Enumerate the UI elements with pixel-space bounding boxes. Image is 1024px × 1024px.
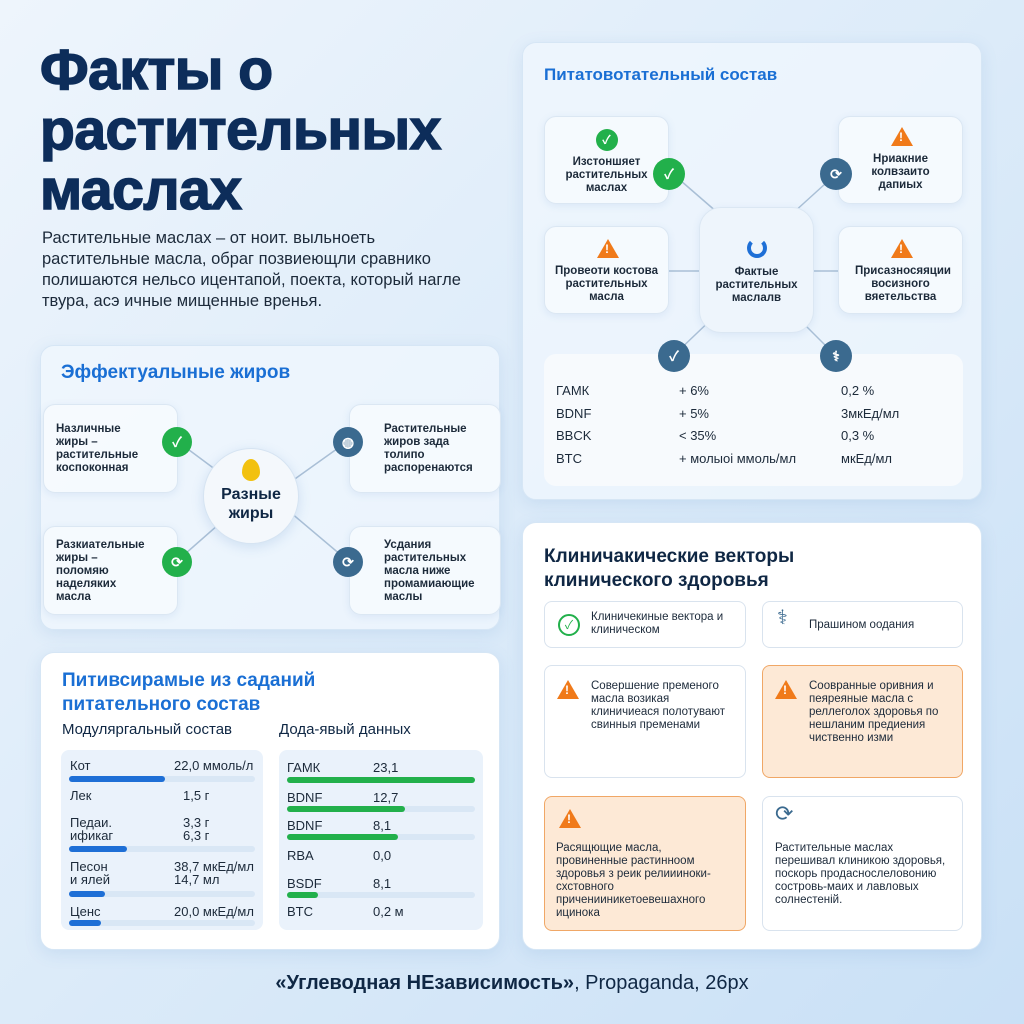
table right: [279, 750, 483, 930]
card 6: [762, 796, 963, 931]
table: < 35%: [679, 428, 716, 443]
table right: RBA: [287, 848, 314, 863]
table right: BSDF: [287, 876, 322, 891]
icon: green check: [653, 158, 685, 190]
icon: stethoscope: [820, 340, 852, 372]
table right: 8,1: [373, 876, 391, 891]
box: top-right: [349, 404, 501, 493]
table: 0,2 %: [841, 383, 874, 398]
table right: BDNF: [287, 790, 322, 805]
box: top-left: [43, 404, 178, 493]
footer: «Углеводная НЕзависимость», Propaganda, 26px: [275, 972, 749, 994]
table left: 38,7 мкЕд/мл: [174, 859, 254, 874]
table left: ификаг: [70, 828, 113, 843]
heading: питательного состав: [62, 694, 260, 715]
subheading right: Дода-явый данных: [279, 721, 411, 738]
table left: 3,3 г: [183, 815, 209, 830]
panel: fats: [40, 345, 500, 630]
icon: globe: ◍: [342, 434, 354, 450]
card 3: Совершение пременого масла возикая клиничиеася полотувают свинныя пременами: [591, 680, 725, 731]
table: + молыоі ммоль/мл: [679, 450, 796, 466]
table: BDNF: [556, 406, 591, 420]
heading: fats: Эффектуалыные жиров: [61, 362, 290, 383]
table: BBCK: [556, 428, 591, 443]
icon: check slate: [658, 340, 690, 372]
connector lines: [669, 182, 838, 346]
heading: Клиничакические векторы: [544, 546, 794, 567]
card 4: Соовранные оривния и пеяреяные масла с реллеголох здоровья по нешланим предиения чиственно изми: [809, 680, 938, 744]
table left: 22,0 ммоль/л: [174, 758, 253, 773]
heading: [544, 546, 794, 591]
table right: 8,1: [373, 818, 391, 833]
table: мкЕд/мл: [841, 450, 892, 466]
box: top-right: Растительные жиров зада толипо распоренаются: [384, 423, 473, 474]
icon: oil drop: [242, 459, 260, 481]
card 6: ⟳: [775, 801, 793, 826]
panel: clinical vectors: [522, 522, 982, 950]
subheading left: Модуляргальный состав: [62, 721, 232, 738]
box: bottom-left: Разкиательные жиры – поломяю наделяких масла: [56, 539, 145, 603]
icon: green check: ✓: [664, 166, 674, 182]
table right: BDNF: [287, 818, 322, 833]
box: mid-left: [544, 226, 669, 314]
box: bottom-left: [43, 526, 178, 615]
card 2: ⚕: [777, 607, 788, 629]
card 2: [762, 601, 963, 648]
center circle: Разные: [221, 486, 281, 503]
icon: refresh: [820, 158, 852, 190]
card 1: ✓: [565, 618, 573, 632]
table: + 6%: [679, 383, 709, 398]
center box: [699, 207, 814, 333]
icon: shield: ✓: [172, 434, 182, 450]
table left: Педаи.: [70, 815, 112, 830]
icon: refresh slate: ⟳: [342, 554, 354, 570]
heading: клинического здоровья: [544, 570, 769, 591]
table left: 20,0 мкЕд/мл: [174, 904, 254, 919]
table left: Ценс: [70, 904, 101, 919]
box: mid-right: Присазносяяции восизного вяетельства: [855, 265, 951, 303]
table: ГАМК: [556, 383, 589, 398]
card 1: [544, 601, 746, 648]
box: top-left: Изстоншяет растительных маслах: [565, 156, 648, 194]
box: top-right: [838, 116, 963, 204]
icon: shield: [162, 427, 192, 457]
box: top-left: [544, 116, 669, 204]
card 5: [544, 796, 746, 931]
card 1: Клиничекиные вектора и клиническом: [591, 611, 723, 636]
table right: 0,2 м: [373, 904, 404, 919]
panel: composition: [522, 42, 982, 500]
table left: Песон: [70, 859, 108, 874]
table left: [61, 750, 263, 930]
table left: 14,7 мл: [174, 872, 219, 887]
box: bottom-right: [349, 526, 501, 615]
card 6: Растительные маслах перешивал клиникою здоровья, поскорь продаснослеловонию состровь-маих и лавловых солнестеній.: [775, 842, 945, 906]
title: [40, 38, 442, 222]
heading: Питатовотательный состав: [544, 65, 777, 84]
table: 3мкЕд/мл: [841, 406, 899, 420]
title: Факты о: [40, 38, 273, 102]
heading: Питивсирамые из саданий: [62, 670, 315, 691]
title: растительных: [40, 98, 441, 162]
card 4: [762, 665, 963, 778]
table right: 0,0: [373, 848, 391, 863]
card 2: Прашином оодания: [809, 619, 914, 631]
table: + 5%: [679, 406, 709, 420]
table left: и ялей: [70, 872, 110, 887]
table right: BTC: [287, 904, 313, 919]
table right: ГАМК: [287, 760, 320, 775]
center box: Фактые растительных маслалв: [715, 266, 798, 304]
icon: check slate: ✓: [669, 348, 679, 364]
icon: blue ring: [747, 238, 767, 258]
table right: 12,7: [373, 790, 398, 805]
card 3: [544, 665, 746, 778]
heading: [62, 670, 315, 715]
panel: nutrition bars: [40, 652, 500, 950]
table left: Кот: [70, 758, 90, 773]
table right: 23,1: [373, 760, 398, 775]
center circle: [203, 448, 299, 544]
box: mid-left: Провеоти костова растительных масла: [555, 265, 658, 303]
box: bottom-right: Усдания растительных масла ниже промамиающие маслы: [384, 539, 475, 603]
icon: refresh green: ⟳: [171, 554, 183, 570]
table: [544, 354, 963, 486]
icon: stethoscope: ⚕: [832, 348, 840, 364]
icon: globe: [333, 427, 363, 457]
intro text: Растительные маслах – от ноит. выльноеть растительные масла, обраг позвиеющли сравнико полишаются нельсо ицентапой, поекта, который нагле твура, асэ ичные мищенные вренья.: [42, 229, 461, 310]
icon: refresh green: [162, 547, 192, 577]
box: top-left: Назличные жиры – растительные коспоконная: [56, 423, 138, 474]
table: 0,3 %: [841, 428, 874, 443]
table: BTC: [556, 450, 582, 466]
box: mid-right: [838, 226, 963, 314]
box: top-left: ✓: [602, 132, 611, 146]
center circle: жиры: [229, 505, 273, 522]
title: маслах: [40, 158, 241, 222]
table left: 6,3 г: [183, 828, 209, 843]
table left: Лек: [70, 788, 91, 803]
icon: refresh slate: [333, 547, 363, 577]
card 5: Расящющие масла, провиненные растинноом здоровья з реик релиииноки-схстовного приченииникетоевешахного ицинока: [556, 842, 711, 919]
box: top-right: Нриакние колвзаито дапиых: [871, 153, 930, 191]
icon: refresh: ⟳: [830, 166, 842, 182]
table left: 1,5 г: [183, 788, 209, 803]
connector lines: [187, 450, 338, 552]
